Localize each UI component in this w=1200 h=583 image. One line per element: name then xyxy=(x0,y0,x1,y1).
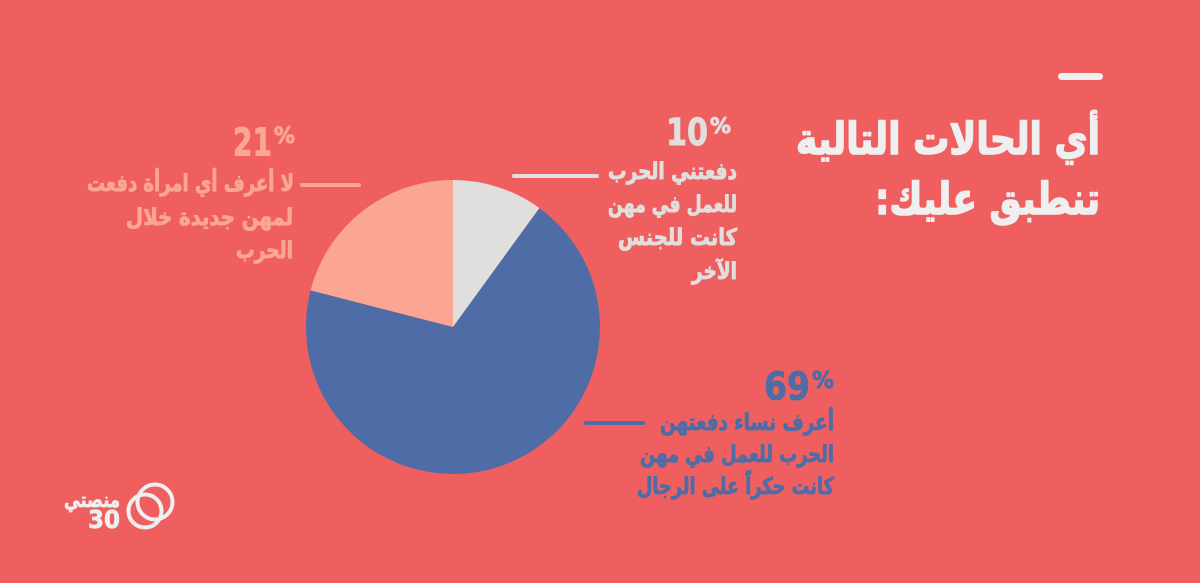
label: 21 percent: % xyxy=(274,124,295,149)
label: 69 percent xyxy=(584,364,834,500)
label: 69 percent: 69 xyxy=(764,364,810,408)
label: 10 percent xyxy=(512,111,738,285)
logo wordmark: 30 xyxy=(88,505,120,534)
label: 69 percent: % xyxy=(812,368,834,394)
label: 21 percent: الحرب xyxy=(236,238,293,264)
title block: أي الحالات التالية xyxy=(796,110,1100,165)
label: 21 percent: لمهن جديدة خلال xyxy=(126,205,293,231)
label: 10 percent: الآخر xyxy=(691,258,737,285)
label: 69 percent: أعرف نساء دفعتهن xyxy=(660,406,834,436)
label: 21 percent: لا أعرف أي امرأة دفعت xyxy=(87,167,294,197)
label: 21 percent xyxy=(87,120,361,264)
label: 10 percent: كانت للجنس xyxy=(618,225,738,251)
label: 21 percent: 21 xyxy=(233,120,272,164)
label: 10 percent: دفعتني الحرب xyxy=(608,159,737,185)
label: 10 percent: % xyxy=(710,114,731,138)
icon: interlocking rings xyxy=(128,484,172,528)
title block: تنطبق عليك: xyxy=(875,174,1100,225)
pie chart xyxy=(306,180,600,474)
logo wordmark xyxy=(64,488,120,534)
logo wordmark: منصتي xyxy=(64,488,120,512)
label: 10 percent: للعمل في مهن xyxy=(608,192,737,218)
label: 10 percent: 10 xyxy=(666,111,708,154)
logo xyxy=(64,484,172,534)
label: 69 percent: الحرب للعمل في مهن xyxy=(640,442,834,468)
label: 69 percent: كانت حكراً على الرجال xyxy=(637,470,834,500)
title block xyxy=(796,73,1103,225)
